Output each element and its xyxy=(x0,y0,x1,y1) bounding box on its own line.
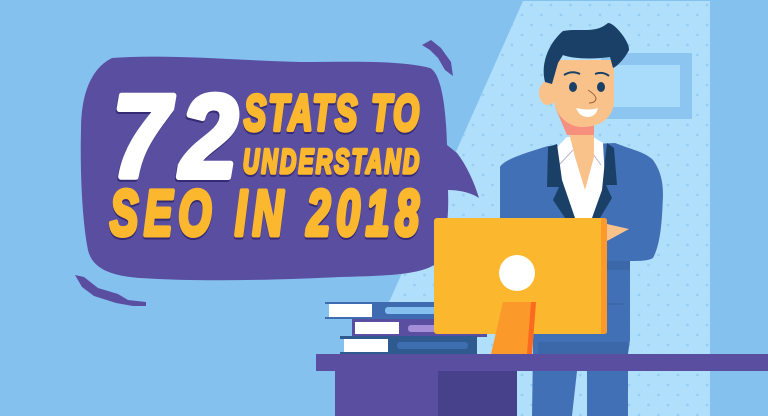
number 72: 72 xyxy=(112,70,238,202)
desk xyxy=(316,354,768,416)
stack of books xyxy=(325,302,487,354)
desk pedestal shade xyxy=(438,371,517,416)
speech bubble xyxy=(81,57,479,280)
smile xyxy=(576,108,598,117)
wall window frame xyxy=(607,59,686,113)
eyes xyxy=(569,82,605,92)
hair xyxy=(544,23,629,84)
headline xyxy=(110,70,420,249)
torso and jacket xyxy=(500,143,663,354)
person xyxy=(500,23,663,416)
face xyxy=(553,60,614,127)
line: stats to: STATS TO xyxy=(244,85,419,141)
jacket shade xyxy=(538,261,630,354)
brush stroke top right xyxy=(422,40,453,76)
top book xyxy=(325,302,440,319)
dotted wall panel xyxy=(335,1,710,416)
line: seo in 2018: SEO IN 2018 xyxy=(110,178,420,249)
middle book xyxy=(352,319,487,337)
neck xyxy=(567,125,594,190)
monitor stand xyxy=(491,302,536,354)
hand xyxy=(607,224,629,241)
legs xyxy=(532,350,628,416)
neck shadow xyxy=(555,107,594,135)
desk pedestal xyxy=(335,371,438,416)
monitor screen back xyxy=(434,218,607,334)
jacket lapels xyxy=(547,143,617,218)
nose xyxy=(588,90,596,103)
desk top xyxy=(316,354,768,371)
monitor logo xyxy=(499,255,535,291)
collar lines xyxy=(559,150,601,165)
eyebrows xyxy=(564,72,609,76)
brush stroke bottom left xyxy=(75,275,146,306)
shirt xyxy=(557,137,605,218)
ear xyxy=(539,81,557,105)
line: understand: UNDERSTAND xyxy=(243,143,419,181)
bottom book xyxy=(340,336,477,354)
monitor xyxy=(434,218,607,354)
